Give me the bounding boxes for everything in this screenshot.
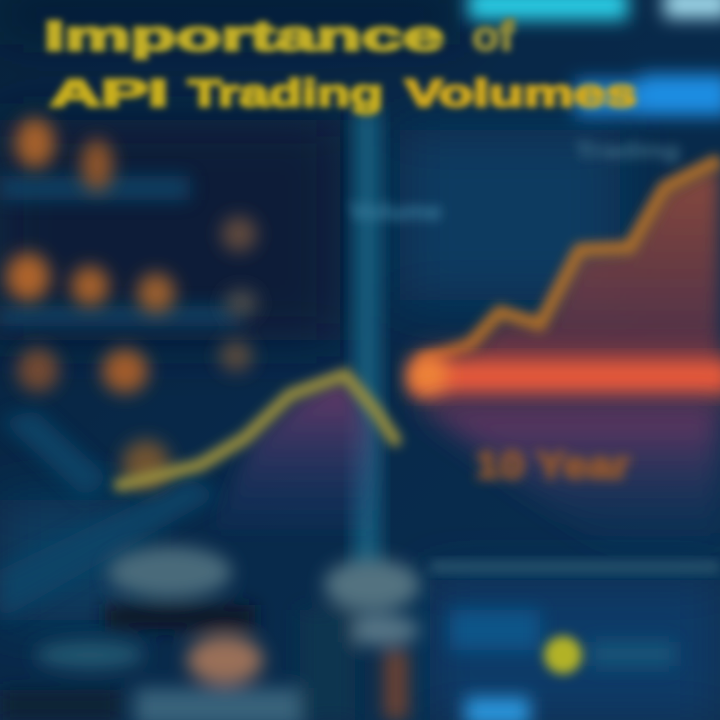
title: of: [472, 12, 515, 59]
title: [44, 12, 637, 115]
lower right fan area: [420, 405, 720, 550]
orange data dots: [6, 118, 258, 488]
rising chart area: [470, 165, 720, 370]
horizontal divider band: [430, 560, 720, 574]
line chart: central peak: [120, 375, 395, 530]
vertical light beam: [354, 110, 380, 580]
label: top right: Trading: [575, 138, 680, 163]
central chart line: [120, 375, 395, 485]
title: Trading: [188, 73, 383, 115]
lower right orange label: 10 Year: [475, 445, 630, 487]
rising chart line: [420, 160, 720, 362]
left shelf bands: [0, 176, 240, 620]
title: Importance: [44, 12, 444, 59]
glowing red-orange band: [408, 350, 720, 404]
small central label: Volume: [350, 196, 442, 226]
top-right light panels: [468, 0, 720, 116]
lower cluster: grey crowd shapes: [0, 546, 420, 720]
central chart area: [215, 380, 372, 530]
title: API: [50, 73, 168, 115]
line chart: rising right: [420, 160, 720, 370]
title: Volumes: [405, 73, 637, 115]
lower right glow panels: [450, 610, 675, 720]
icon: yellow dot: [544, 636, 582, 674]
